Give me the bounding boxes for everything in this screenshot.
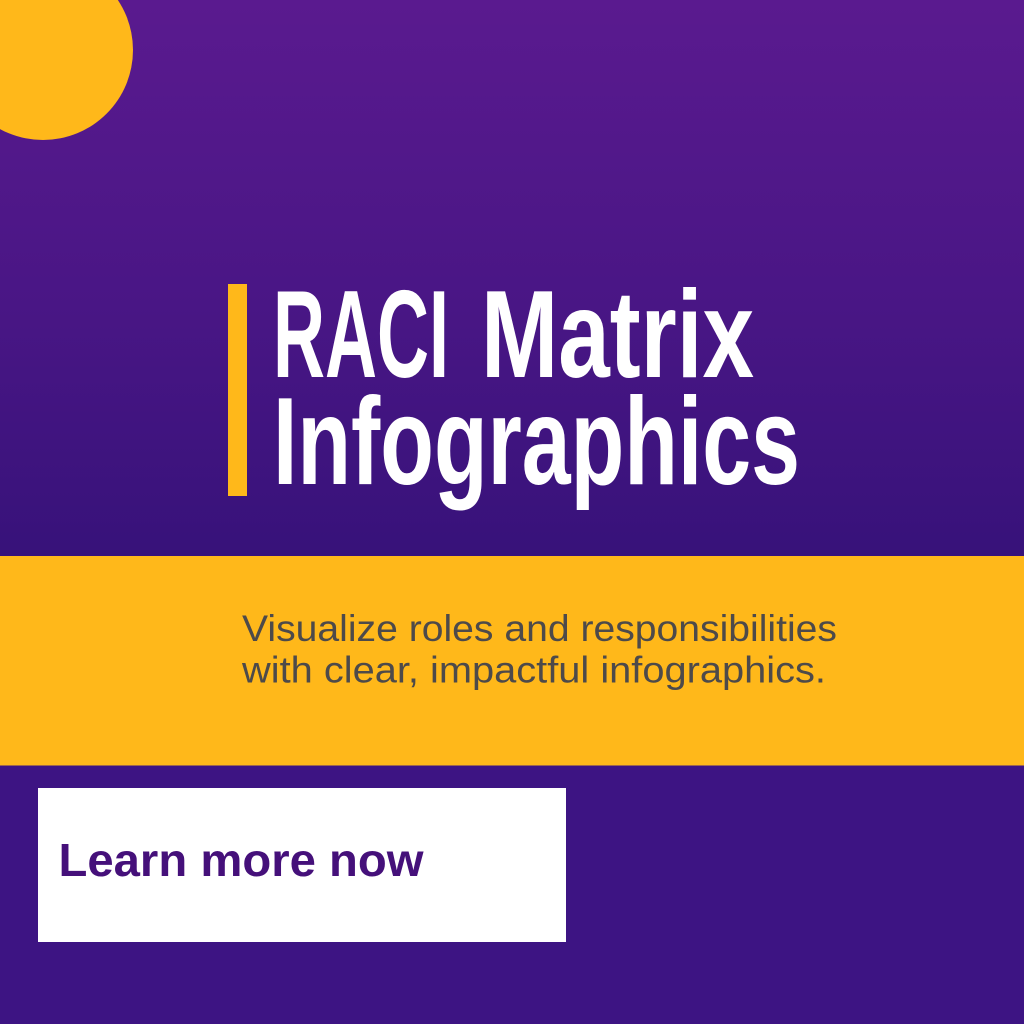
panel: bottom purple section [0,766,1024,1024]
panel: purple gradient background [0,0,1024,556]
title: Matrix [481,266,754,404]
subtitle text: with clear, impactful infographics. [241,648,826,690]
title accent bar [228,284,247,496]
subtitle text [241,607,837,690]
title [273,266,800,511]
call-to-action button: Learn more now [58,834,424,886]
panel: yellow band [0,556,1024,766]
decorative yellow circle [0,0,133,140]
title: RACI [273,266,449,404]
call-to-action button [38,788,566,942]
subtitle text: Visualize roles and responsibilities [242,607,837,649]
title: Infographics [273,373,800,511]
